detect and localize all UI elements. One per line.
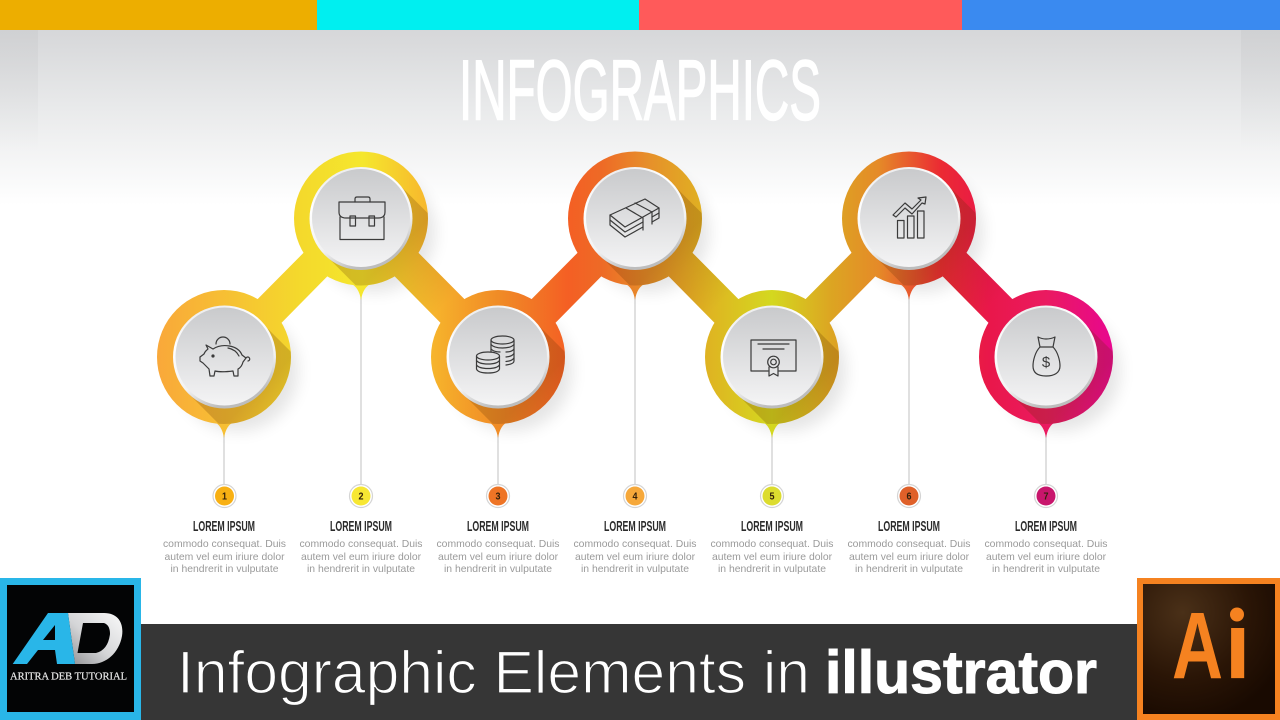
step 6: LOREM IPSUM [878,518,940,535]
step 7 [984,484,1108,575]
step 2: LOREM IPSUM [330,518,392,535]
logo letter D [68,613,122,664]
step 5: LOREM IPSUM [741,518,803,535]
logo: Adobe Illustrator: A [1172,593,1223,699]
step 4: autem vel eum iriure dolor [575,552,696,563]
step 3: in hendrerit in vulputate [444,564,552,575]
step 4: commodo consequat. Duis [573,539,697,550]
footer title light: Infographic Elements in [177,639,810,706]
disc 4 with banknotes icon [584,167,686,270]
step 7: autem vel eum iriure dolor [986,552,1107,563]
step 2: in hendrerit in vulputate [307,564,415,575]
disc 5 with certificate icon [720,306,824,408]
disc 1 with piggy bank icon [173,306,276,408]
logo letter A [13,613,75,664]
long shadows cast by the discs on the rings [191,188,1113,424]
header gradient panel [0,30,1280,205]
step 2: commodo consequat. Duis [299,539,423,550]
title: INFOGRAPHICS [459,44,821,138]
logo: Adobe Illustrator: i [1224,593,1251,699]
step 6: 6 [906,492,912,502]
step 6: in hendrerit in vulputate [855,564,963,575]
step 7: in hendrerit in vulputate [992,564,1100,575]
step 3 [436,484,560,575]
icon: stack of banknotes [610,199,659,237]
step 1: commodo consequat. Duis [163,539,286,550]
step 5: in hendrerit in vulputate [718,564,826,575]
step 4: 4 [632,492,638,502]
icon: piggy bank [200,337,250,376]
step 3: LOREM IPSUM [467,518,529,535]
step 1: 1 [222,492,227,502]
step 1: LOREM IPSUM [193,518,255,535]
step 4 [573,484,697,575]
step 3: autem vel eum iriure dolor [438,552,559,563]
step 5 [710,484,834,575]
disc 7 with money bag icon [994,306,1098,408]
step 7: commodo consequat. Duis [984,539,1108,550]
logo: AD tutorial [0,578,141,720]
step 2: 2 [358,492,364,502]
step 2: autem vel eum iriure dolor [301,552,422,563]
step 5: 5 [770,492,775,502]
footer banner [141,624,1137,720]
disc 6 with growth chart icon [858,167,960,270]
step 7: 7 [1044,492,1049,502]
step 7: LOREM IPSUM [1015,518,1077,535]
icon: briefcase [339,197,385,240]
step 1: autem vel eum iriure dolor [164,552,285,563]
step 5: autem vel eum iriure dolor [712,552,833,563]
step 4: in hendrerit in vulputate [581,564,689,575]
logo caption: ARITRA DEB TUTORIAL [10,672,127,682]
step 1 [163,484,286,575]
step 5: commodo consequat. Duis [710,539,834,550]
top colour bar [0,0,1280,30]
step 1: in hendrerit in vulputate [170,564,279,575]
disc 2 with briefcase icon [310,167,412,270]
step 3: commodo consequat. Duis [436,539,560,550]
icon: bar chart with arrow [893,197,926,238]
zigzag chain with seven rings [157,152,1113,438]
icon: certificate [751,340,796,376]
step 3: 3 [496,492,501,502]
icon: money bag: $ [1042,354,1051,371]
step 6 [847,484,971,575]
logo: Adobe Illustrator [1137,578,1280,720]
icon: coin stacks [476,336,514,373]
step 2 [299,484,423,575]
step 4: LOREM IPSUM [604,518,666,535]
step 6: autem vel eum iriure dolor [849,552,970,563]
soft drop shadows behind the chain [178,172,1120,431]
leader lines [224,292,1046,485]
footer title bold: illustrator [825,639,1097,706]
step 6: commodo consequat. Duis [847,539,971,550]
disc 3 with coins icon [446,306,550,408]
